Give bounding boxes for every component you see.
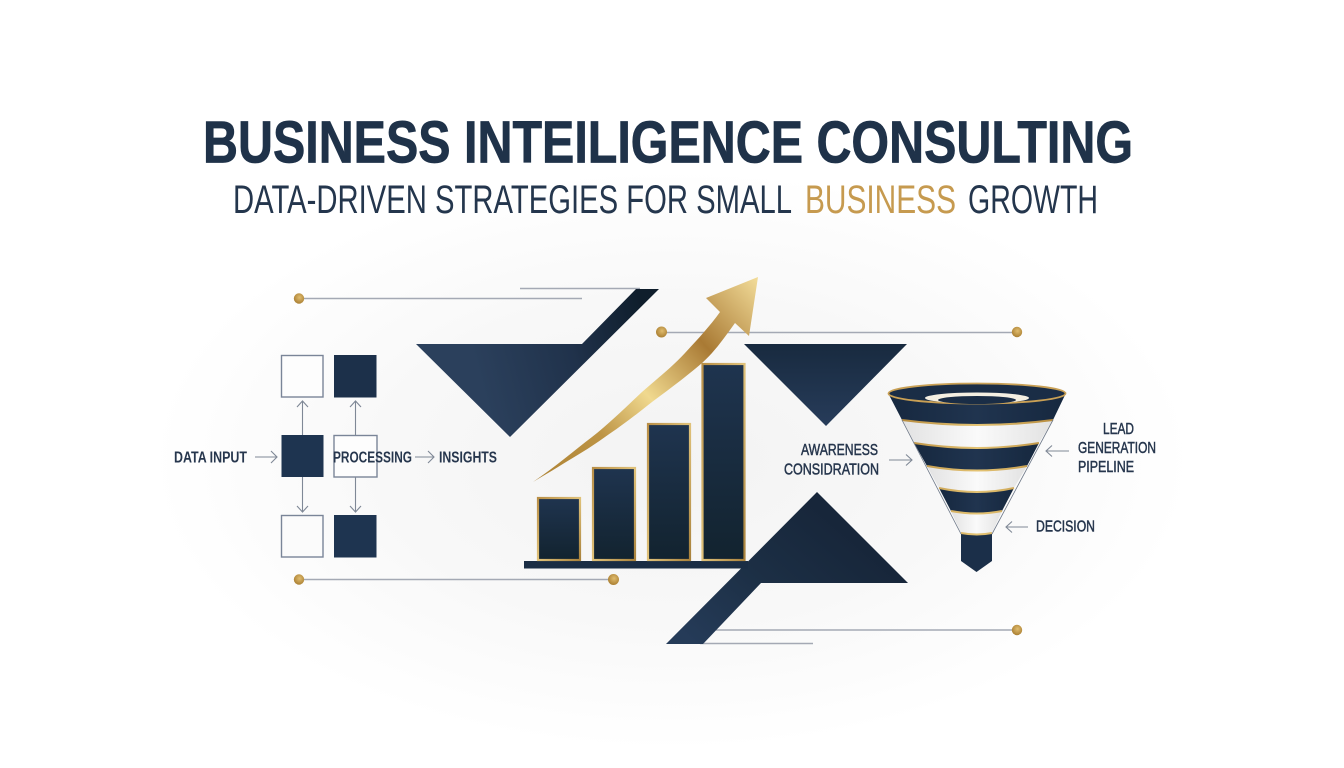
bar 1 bbox=[538, 498, 580, 560]
label: consideration: CONSIDRATION bbox=[784, 462, 879, 478]
bar 3 bbox=[648, 424, 690, 560]
decorative triangle centre bbox=[744, 344, 907, 426]
label: data input: DATA INPUT bbox=[174, 450, 247, 466]
title: BUSINESS INTEILIGENCE CONSULTING bbox=[203, 110, 1133, 176]
funnel band 4 light bbox=[927, 466, 1027, 492]
funnel band 1 dark bbox=[888, 393, 1066, 425]
label: insights: INSIGHTS bbox=[439, 450, 497, 466]
output square top bbox=[334, 355, 376, 398]
bar 2 bbox=[593, 468, 635, 560]
growth arrow bbox=[533, 277, 758, 482]
input square bottom bbox=[282, 516, 323, 557]
label: awareness: AWARENESS bbox=[801, 442, 878, 459]
label: decision: DECISION bbox=[1036, 518, 1095, 536]
decorative triangle lower bbox=[666, 492, 908, 644]
bar 4 bbox=[702, 364, 744, 560]
annotation arrows bbox=[889, 446, 1069, 532]
decorative triangle left bbox=[416, 289, 659, 437]
process flow diagram bbox=[174, 355, 497, 558]
funnel band 2 light bbox=[902, 420, 1053, 448]
subtitle: DATA-DRIVEN STRATEGIES FOR SMALL bbox=[233, 178, 792, 222]
label: lead: LEAD bbox=[1103, 421, 1134, 438]
baseline bbox=[524, 561, 748, 568]
funnel annotations bbox=[784, 421, 1156, 536]
bottom-left connector line with gold dots bbox=[294, 574, 619, 585]
funnel band 6 light bbox=[951, 511, 1002, 534]
funnel bbox=[888, 384, 1066, 572]
top-left connector line with gold dot bbox=[294, 288, 640, 304]
flow arrows bbox=[255, 401, 434, 512]
output square bottom bbox=[334, 515, 376, 558]
label: generation: GENERATION bbox=[1078, 440, 1156, 457]
funnel band 3 dark bbox=[914, 443, 1039, 470]
funnel spout bbox=[961, 534, 992, 572]
funnel band 5 dark bbox=[939, 488, 1014, 514]
funnel inner opening bbox=[938, 396, 1016, 404]
centre dark square bbox=[282, 435, 324, 477]
bar chart bbox=[524, 364, 748, 568]
label: pipeline: PIPELINE bbox=[1078, 459, 1134, 476]
funnel gold rings bbox=[902, 420, 1053, 534]
funnel side outline bbox=[902, 420, 1053, 534]
input square top bbox=[282, 356, 323, 397]
funnel rim bbox=[888, 384, 1066, 404]
label: processing: PROCESSING bbox=[333, 450, 412, 466]
right top connector line with gold dots bbox=[656, 326, 1022, 338]
processing square bbox=[334, 436, 377, 477]
subtitle: GROWTH bbox=[968, 178, 1098, 222]
right bottom connector lines with gold dot bbox=[700, 625, 1022, 644]
funnel inner ring bbox=[925, 392, 1029, 404]
subtitle: BUSINESS bbox=[805, 178, 956, 222]
